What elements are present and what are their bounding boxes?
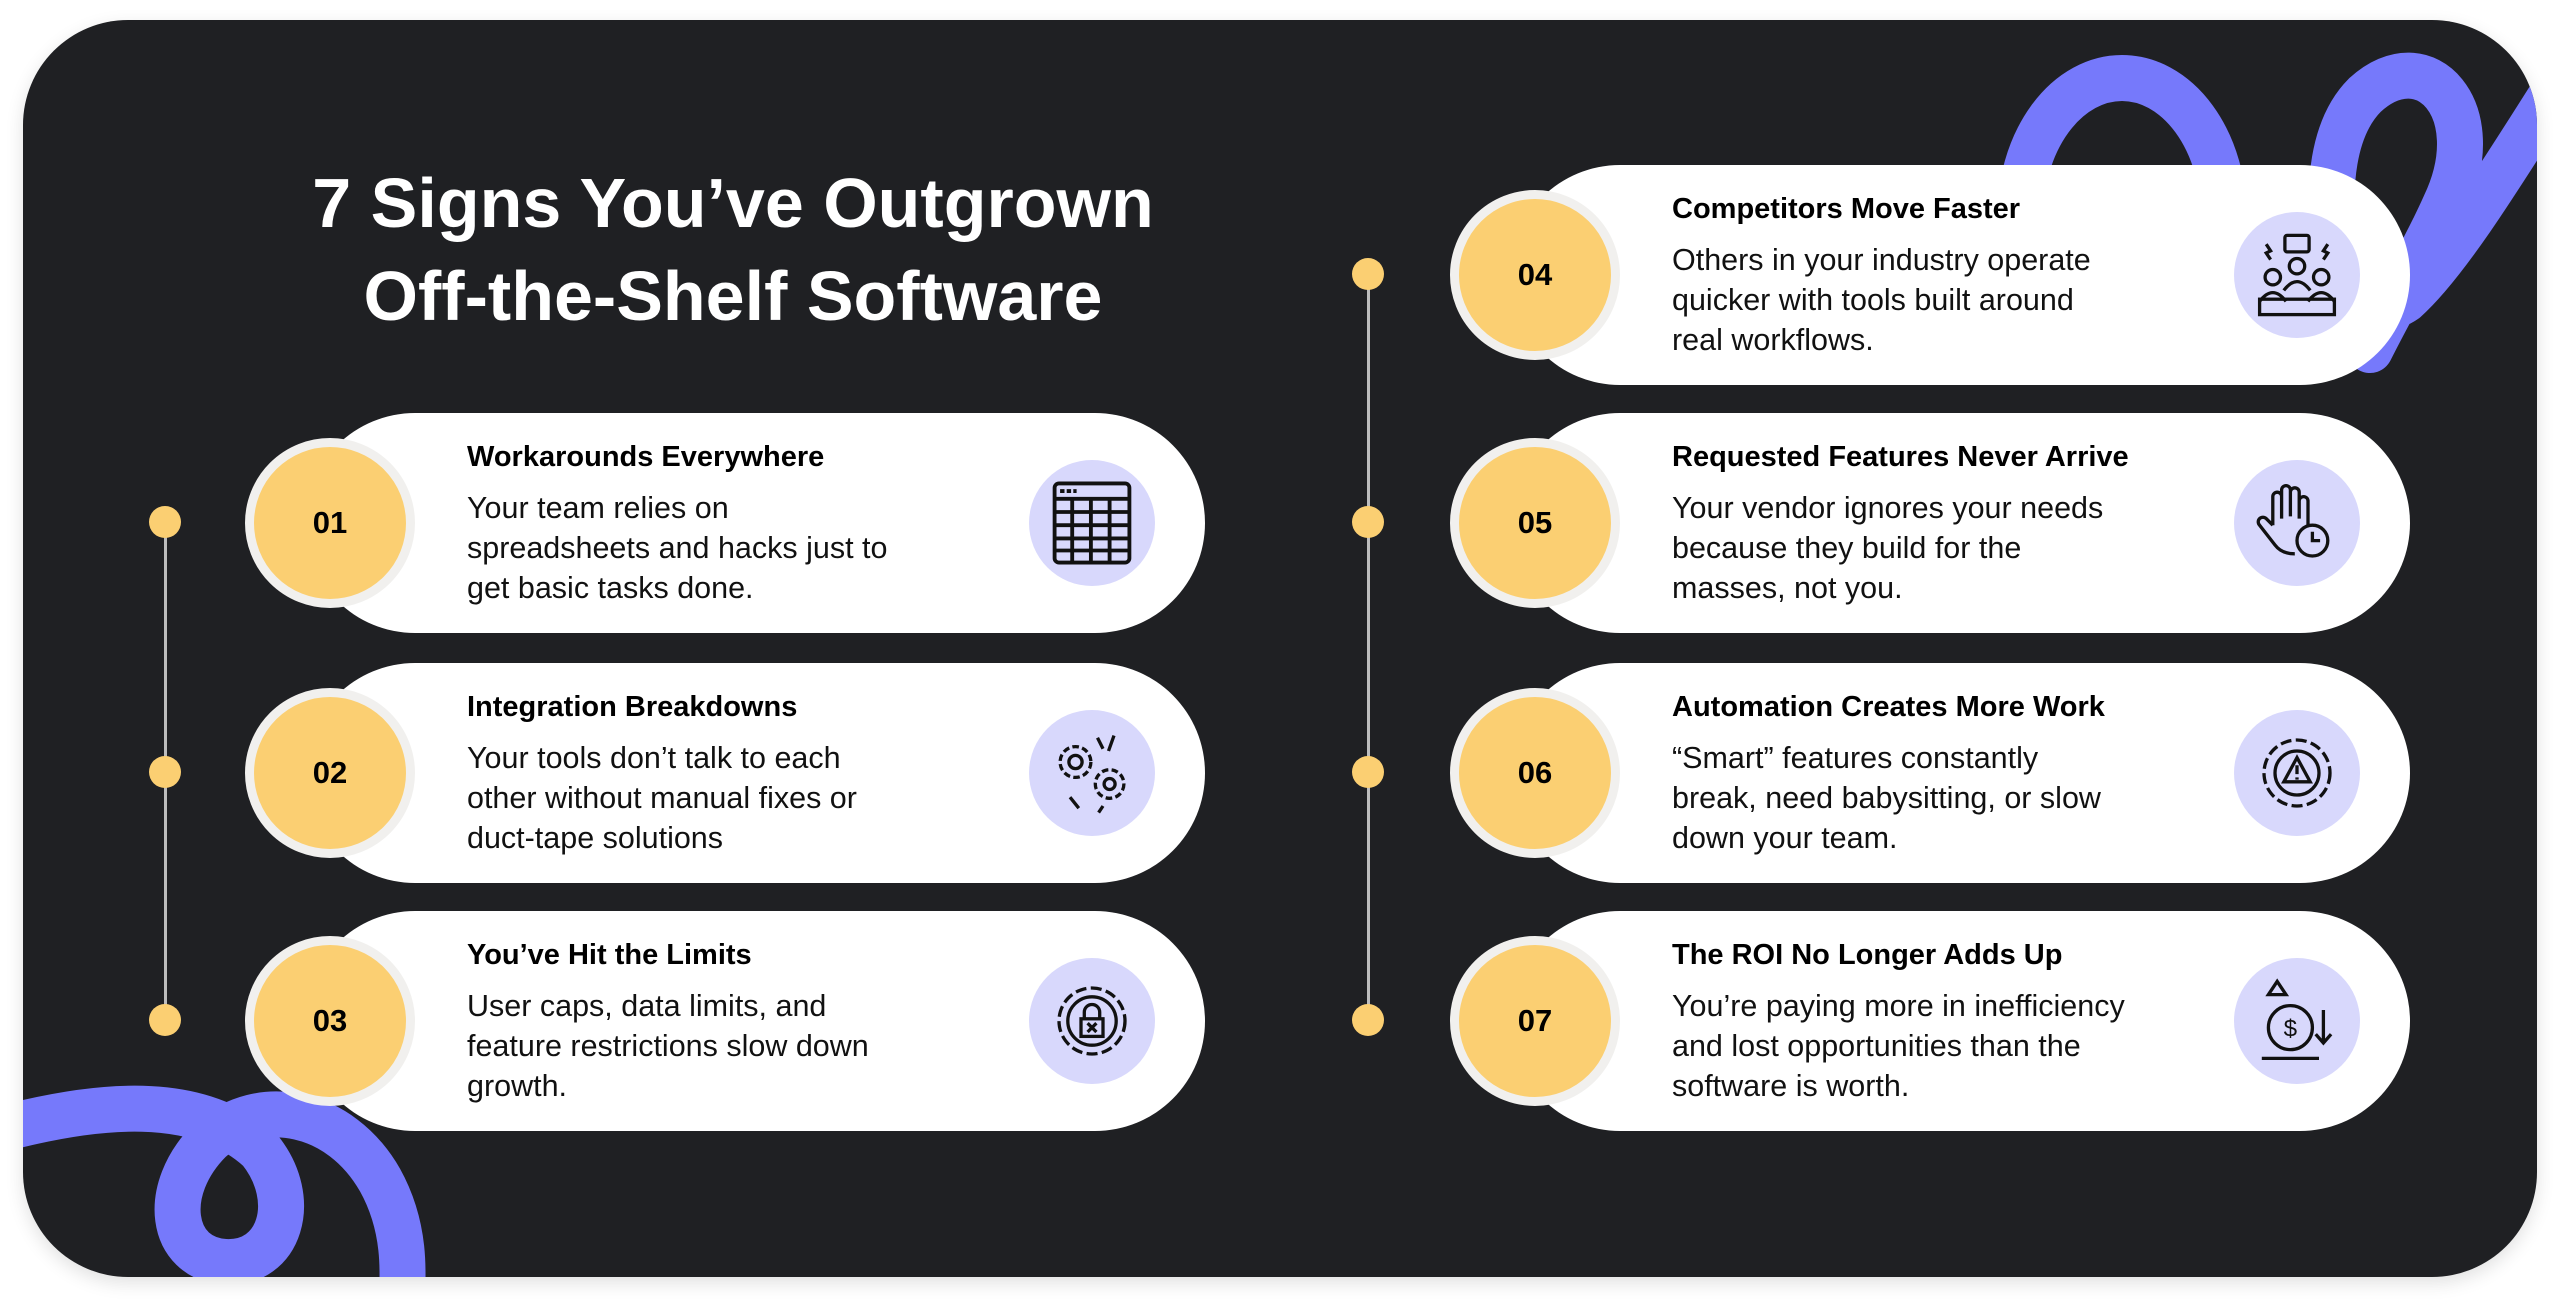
card 07: software is worth. — [1672, 1069, 1909, 1103]
card 04: Competitors Move Faster — [1672, 193, 2020, 225]
card 05: 05 — [1518, 505, 1552, 540]
card 02: duct-tape solutions — [467, 821, 723, 855]
timeline right — [1352, 258, 1384, 1036]
icon: team — [2234, 212, 2360, 338]
icon: hand with clock — [2234, 460, 2360, 586]
card 04: real workflows. — [1672, 323, 1874, 357]
icon: money loss: $ — [2284, 1015, 2298, 1042]
card 06 — [1450, 663, 2410, 883]
title — [312, 164, 1154, 335]
card 07 — [1450, 911, 2410, 1131]
card 05 — [1450, 413, 2410, 633]
icon: broken gears — [1029, 710, 1155, 836]
icon: spreadsheet — [1029, 460, 1155, 586]
card 02: Your tools don’t talk to each — [467, 741, 841, 775]
card 04: Others in your industry operate — [1672, 243, 2091, 277]
card 01: spreadsheets and hacks just to — [467, 531, 887, 565]
icon: gear warning — [2234, 710, 2360, 836]
card 05: because they build for the — [1672, 531, 2021, 565]
card 02 — [245, 663, 1205, 883]
card 03: feature restrictions slow down — [467, 1029, 869, 1063]
card 07: You’re paying more in inefficiency — [1672, 989, 2125, 1023]
card 01: 01 — [313, 505, 347, 540]
card 04: 04 — [1518, 257, 1552, 292]
title: Off-the-Shelf Software — [364, 257, 1102, 335]
card 07: 07 — [1518, 1003, 1552, 1038]
card 04 — [1450, 165, 2410, 385]
icon: money loss — [2234, 958, 2360, 1084]
card 07: and lost opportunities than the — [1672, 1029, 2081, 1063]
card 03: You’ve Hit the Limits — [467, 939, 752, 971]
card 06: “Smart” features constantly — [1672, 741, 2038, 775]
card 01: get basic tasks done. — [467, 571, 754, 605]
icon: gear lock — [1029, 958, 1155, 1084]
card 03: 03 — [313, 1003, 347, 1038]
card 02: Integration Breakdowns — [467, 691, 797, 723]
card 02: other without manual fixes or — [467, 781, 857, 815]
card 05: Your vendor ignores your needs — [1672, 491, 2103, 525]
title: 7 Signs You’ve Outgrown — [312, 164, 1154, 242]
card 06: break, need babysitting, or slow — [1672, 781, 2101, 815]
card 06: down your team. — [1672, 821, 1897, 855]
card 03: growth. — [467, 1069, 567, 1103]
card 03: User caps, data limits, and — [467, 989, 826, 1023]
card 01: Your team relies on — [467, 491, 729, 525]
timeline left — [149, 506, 181, 1036]
card 04: quicker with tools built around — [1672, 283, 2074, 317]
card 02: 02 — [313, 755, 347, 790]
card 05: masses, not you. — [1672, 571, 1903, 605]
card 07: The ROI No Longer Adds Up — [1672, 939, 2062, 971]
card 06: Automation Creates More Work — [1672, 691, 2105, 723]
card 01 — [245, 413, 1205, 633]
card 03 — [245, 911, 1205, 1131]
card 05: Requested Features Never Arrive — [1672, 441, 2129, 473]
card 06: 06 — [1518, 755, 1552, 790]
card 01: Workarounds Everywhere — [467, 441, 824, 473]
